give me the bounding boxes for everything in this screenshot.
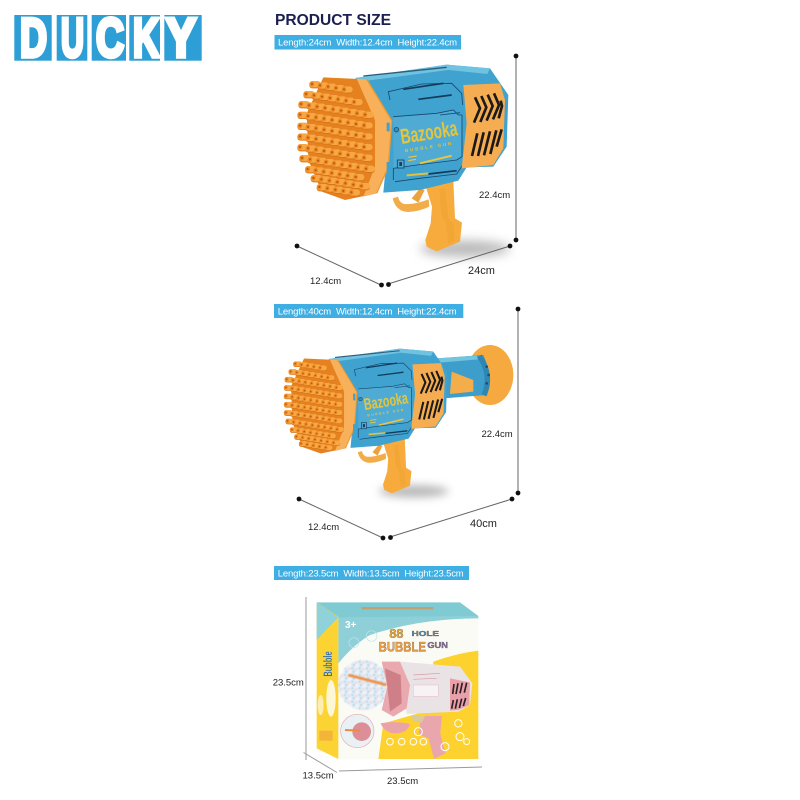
box title: HOLE — [412, 629, 439, 638]
box side panel — [317, 602, 338, 759]
inset circle — [341, 714, 374, 748]
label: height 22.4cm, extended: 22.4cm — [482, 429, 513, 440]
box title: 88 — [389, 627, 403, 641]
box title: GUN — [427, 640, 448, 650]
logo: DUCKY: Y — [166, 6, 196, 68]
dimension lines: box — [304, 597, 482, 772]
box front panel — [338, 616, 478, 759]
product: retail box — [317, 602, 478, 759]
dimension lines: short gun — [295, 54, 518, 287]
label: length 24cm: 24cm — [468, 265, 495, 277]
box top text strip — [362, 607, 433, 609]
heading: product size: PRODUCT SIZE — [275, 12, 391, 29]
box top flap — [317, 602, 478, 617]
logo: DUCKY — [14, 6, 202, 68]
label: length 40cm: 40cm — [470, 518, 497, 530]
dimension lines: extended gun — [297, 307, 520, 540]
label: box width 13.5cm: 13.5cm — [302, 770, 334, 782]
tag: extended bazooka dimensions: Length:40cm Width:12.4cm Height:22.4cm — [278, 306, 457, 318]
pink bubble gun — [382, 662, 472, 759]
label: box length 23.5cm: 23.5cm — [387, 776, 418, 787]
box title — [379, 627, 448, 654]
bubble tray — [381, 722, 410, 733]
product: bubble gun, extended: BUBBLE GUN — [367, 408, 404, 417]
product: bubble gun, short — [297, 65, 510, 257]
product: bubble gun, extended — [284, 345, 513, 497]
extended barrel — [437, 345, 513, 405]
tag: bazooka dimensions: Length:24cm Width:12.4cm Height:22.4cm — [278, 38, 457, 48]
logo: DUCKY: K — [133, 6, 159, 68]
box title: BUBBLE — [379, 638, 426, 654]
label: box height 23.5cm: 23.5cm — [273, 678, 304, 688]
decorative floating bubbles — [387, 720, 470, 751]
product: bubble gun, short: BUBBLE GUN — [405, 141, 452, 153]
logo: DUCKY: C — [96, 6, 124, 68]
logo: DUCKY: D — [20, 6, 47, 68]
label: height 22.4cm: 22.4cm — [479, 190, 510, 201]
label: width 12.4cm: 12.4cm — [310, 276, 341, 287]
box side panel: Bubble — [321, 651, 335, 677]
product: bubble gun, extended: Bazooka — [362, 388, 410, 414]
tag: box dimensions: Length:23.5cm Width:13.5cm Height:23.5cm — [278, 568, 464, 580]
logo: DUCKY: U — [61, 6, 84, 68]
product: bubble gun, short: Bazooka — [399, 116, 459, 149]
label: width 12.4cm, extended: 12.4cm — [308, 522, 339, 533]
box age mark: 3+ — [345, 620, 357, 631]
bubbles stream — [338, 631, 388, 710]
